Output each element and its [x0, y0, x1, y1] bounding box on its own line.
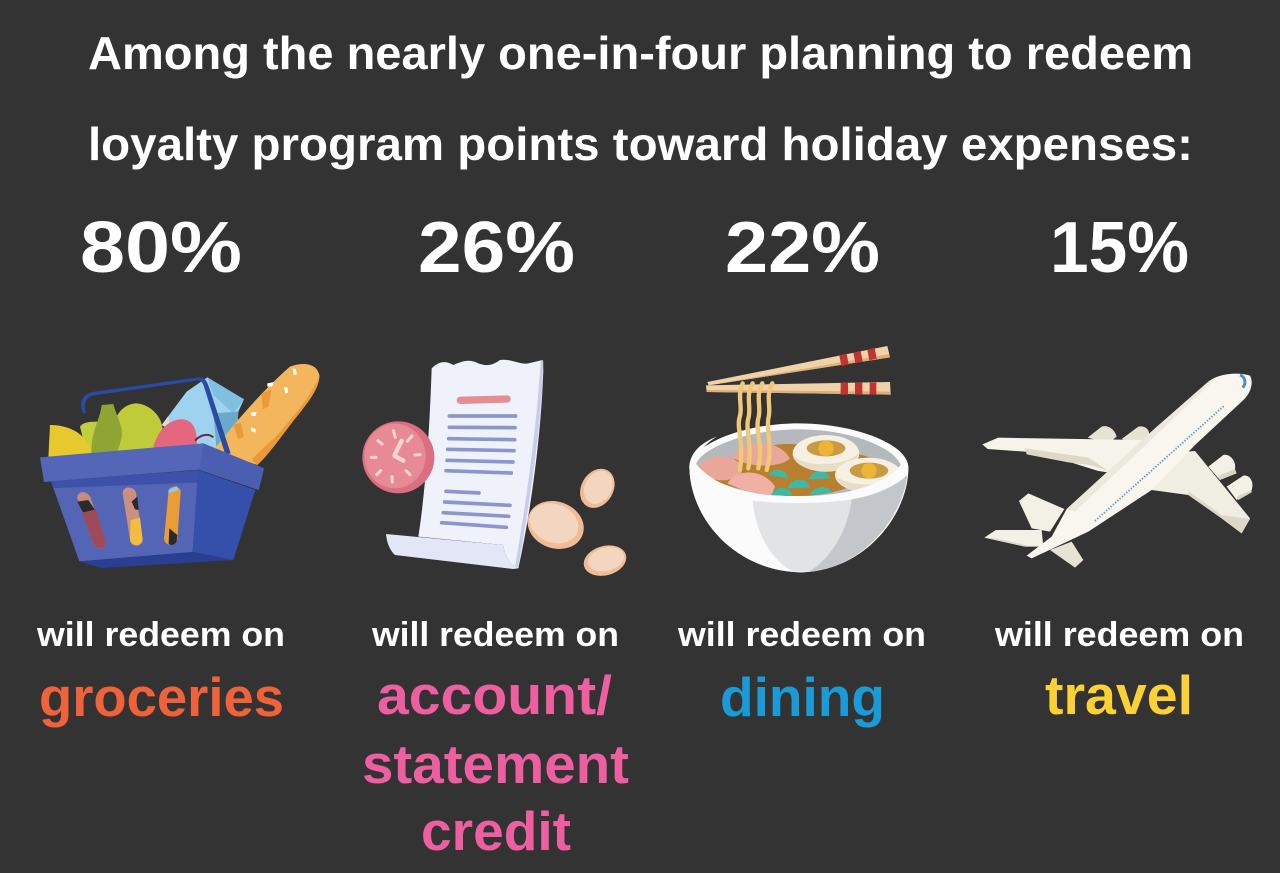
- stat: 80%: 80%: [80, 208, 242, 288]
- icon: grocery basket: [40, 364, 319, 568]
- label: will redeem on dining: dining: [720, 666, 885, 728]
- stat: 22%: 22%: [725, 208, 880, 288]
- title: [88, 27, 1193, 170]
- label: will redeem on groceries: groceries: [39, 666, 284, 728]
- icon: receipt with clock and coins: [362, 360, 630, 580]
- label: will redeem on dining: [677, 616, 926, 728]
- panel: groceries: [36, 208, 319, 728]
- label: will redeem on travel: [994, 616, 1244, 726]
- icon: noodle bowl with chopsticks: [689, 346, 908, 572]
- label: will redeem on travel: will redeem on: [994, 616, 1244, 654]
- icon: airplane: [982, 374, 1252, 568]
- panel: dining: [677, 208, 926, 728]
- label: will redeem on groceries: [36, 616, 285, 728]
- title: Among the nearly one-in-four planning to redeem: [88, 27, 1193, 79]
- title: loyalty program points toward holiday expenses:: [88, 118, 1193, 170]
- label: will redeem on account/statement credit: account/: [377, 664, 612, 726]
- label: will redeem on dining: will redeem on: [677, 616, 926, 654]
- stat: 26%: 26%: [418, 208, 575, 288]
- label: will redeem on account/statement credit: will redeem on: [371, 616, 619, 654]
- panel: account/statement credit: [362, 208, 630, 862]
- stat: 15%: 15%: [1050, 208, 1189, 288]
- panel: travel: [982, 208, 1252, 726]
- label: will redeem on account/statement credit: [362, 616, 629, 862]
- label: will redeem on account/statement credit: statement: [362, 733, 629, 795]
- label: will redeem on travel: travel: [1045, 664, 1193, 726]
- label: will redeem on groceries: will redeem on: [36, 616, 285, 654]
- label: will redeem on account/statement credit: credit: [421, 800, 571, 862]
